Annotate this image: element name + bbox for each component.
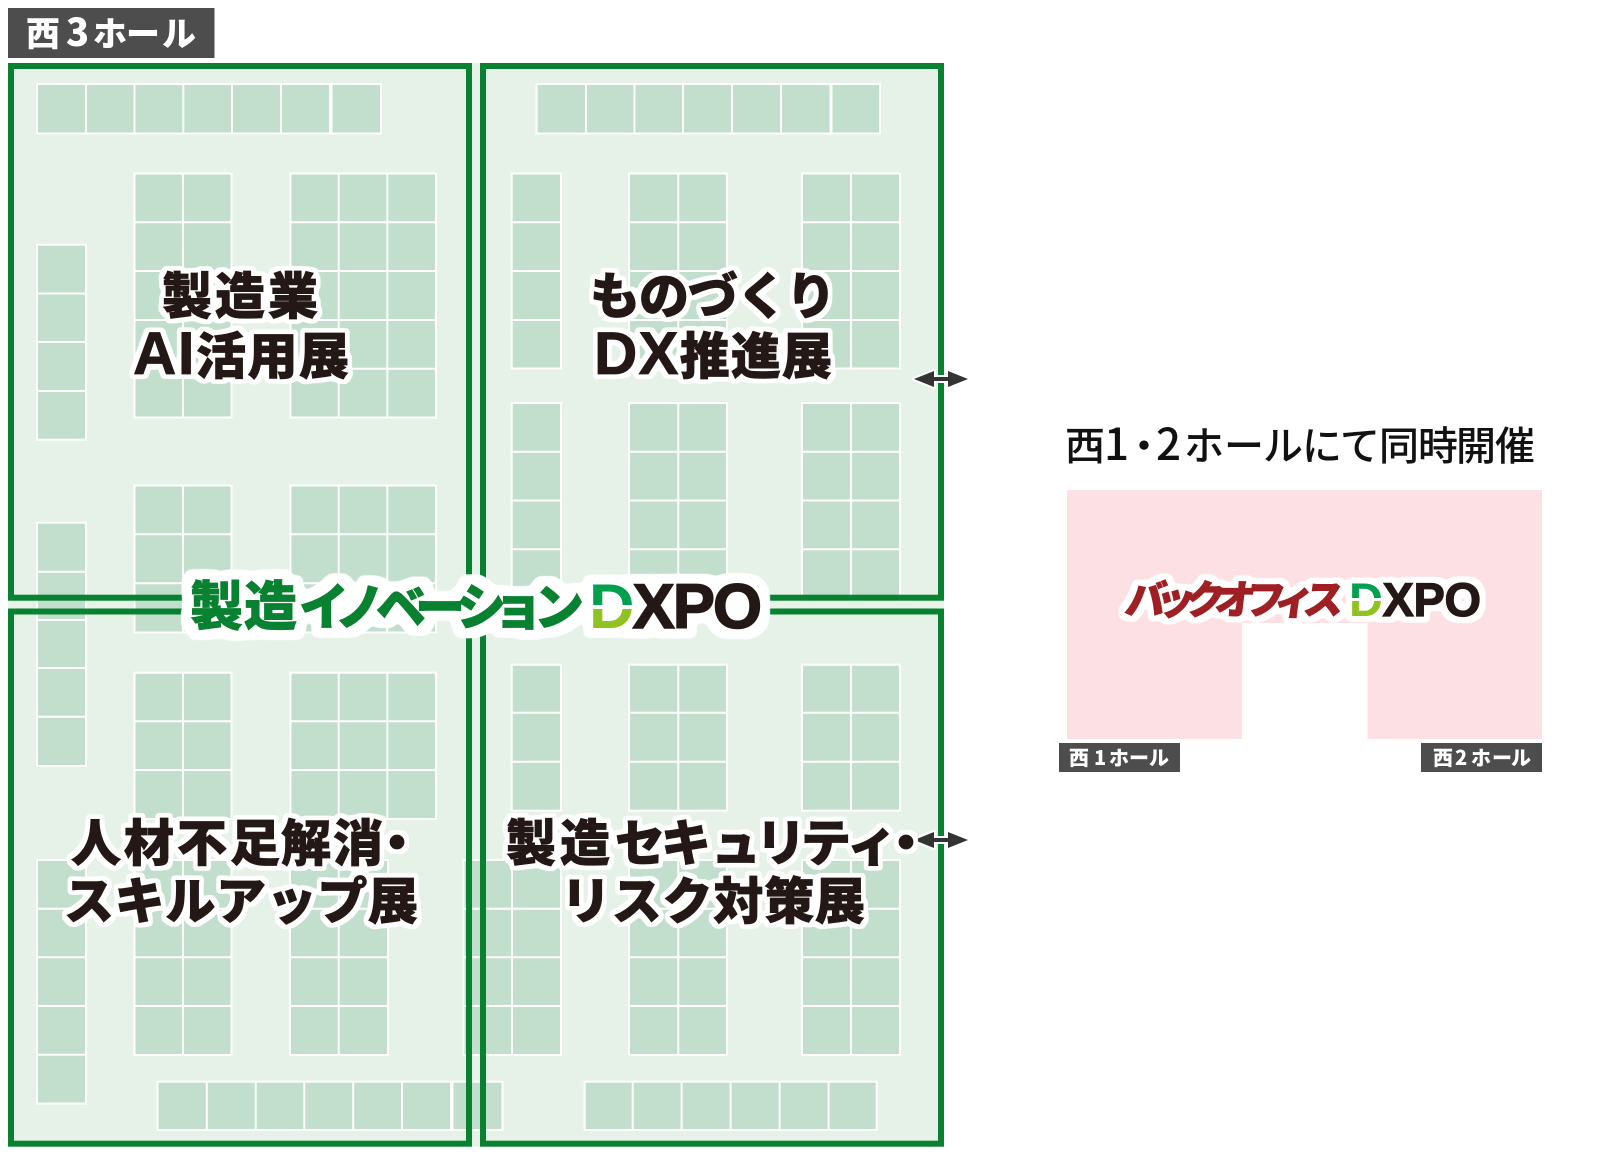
booths: top-right hall xyxy=(512,84,900,598)
hall label: 西3ホール: ホール xyxy=(93,7,196,56)
concurrent halls heading: ホールにて同時開催 xyxy=(1184,414,1535,472)
zone label: ものづくり DX推進展 xyxy=(590,257,836,389)
logo: 製造イノベーション DXPO: DXPO xyxy=(589,572,762,642)
zone label: 製造セキュリティ・リスク対策展: 製造セキュリティ・ xyxy=(506,804,931,876)
zone label: 製造業 AI活用展 xyxy=(133,257,349,389)
concurrent halls heading: ・ xyxy=(1124,414,1164,472)
zone frames xyxy=(11,66,941,1144)
zone label: ものづくり DX推進展: DX推進展 xyxy=(594,317,832,389)
logo: バックオフィス DXPO: バックオフィス xyxy=(1122,567,1349,626)
west 1-2 halls floor shape xyxy=(1067,490,1542,739)
arrow: lower passage to west halls xyxy=(914,832,968,848)
zone label: 人材不足解消・スキルアップ展: スキルアップ展 xyxy=(64,862,418,934)
hall label: 西2ホール: 西2ホール xyxy=(1433,742,1531,771)
zone label: 製造セキュリティ・リスク対策展 xyxy=(506,804,931,934)
booths: top-left hall xyxy=(37,84,436,766)
arrow: upper passage to west halls xyxy=(914,371,968,387)
concurrent halls heading: 西 xyxy=(1065,414,1105,472)
booths: bottom-right hall xyxy=(464,665,900,1130)
booths: bottom-left hall xyxy=(37,673,502,1130)
logo: 製造イノベーション DXPO xyxy=(190,565,762,642)
zone label: ものづくり DX推進展: ものづくり xyxy=(590,257,836,329)
floor background xyxy=(8,63,944,1147)
hall label: 西3ホール: 西 xyxy=(26,7,60,56)
logo: 製造イノベーション DXPO: 製造 xyxy=(190,565,297,641)
logo: 製造イノベーション DXPO: イノベーション xyxy=(299,568,584,640)
zone label: 人材不足解消・スキルアップ展 xyxy=(64,804,422,934)
zone label: 製造業 AI活用展: 製造業 xyxy=(162,257,318,329)
logo: バックオフィス DXPO xyxy=(1122,567,1481,626)
hall label: 西3ホール: 3 xyxy=(66,2,89,57)
logo: バックオフィス DXPO: DXPO xyxy=(1349,573,1481,626)
zone label: 製造セキュリティ・リスク対策展: リスク対策展 xyxy=(561,862,865,934)
zone label: 製造業 AI活用展: AI活用展 xyxy=(133,317,349,389)
concurrent halls heading: 2 xyxy=(1156,409,1181,473)
zone label: 人材不足解消・スキルアップ展: 人材不足解消・ xyxy=(71,804,422,876)
concurrent halls heading: 1 xyxy=(1104,409,1129,473)
hall label: 西1ホール: 西1ホール xyxy=(1069,742,1169,771)
hall label: 西3ホール xyxy=(8,2,214,58)
